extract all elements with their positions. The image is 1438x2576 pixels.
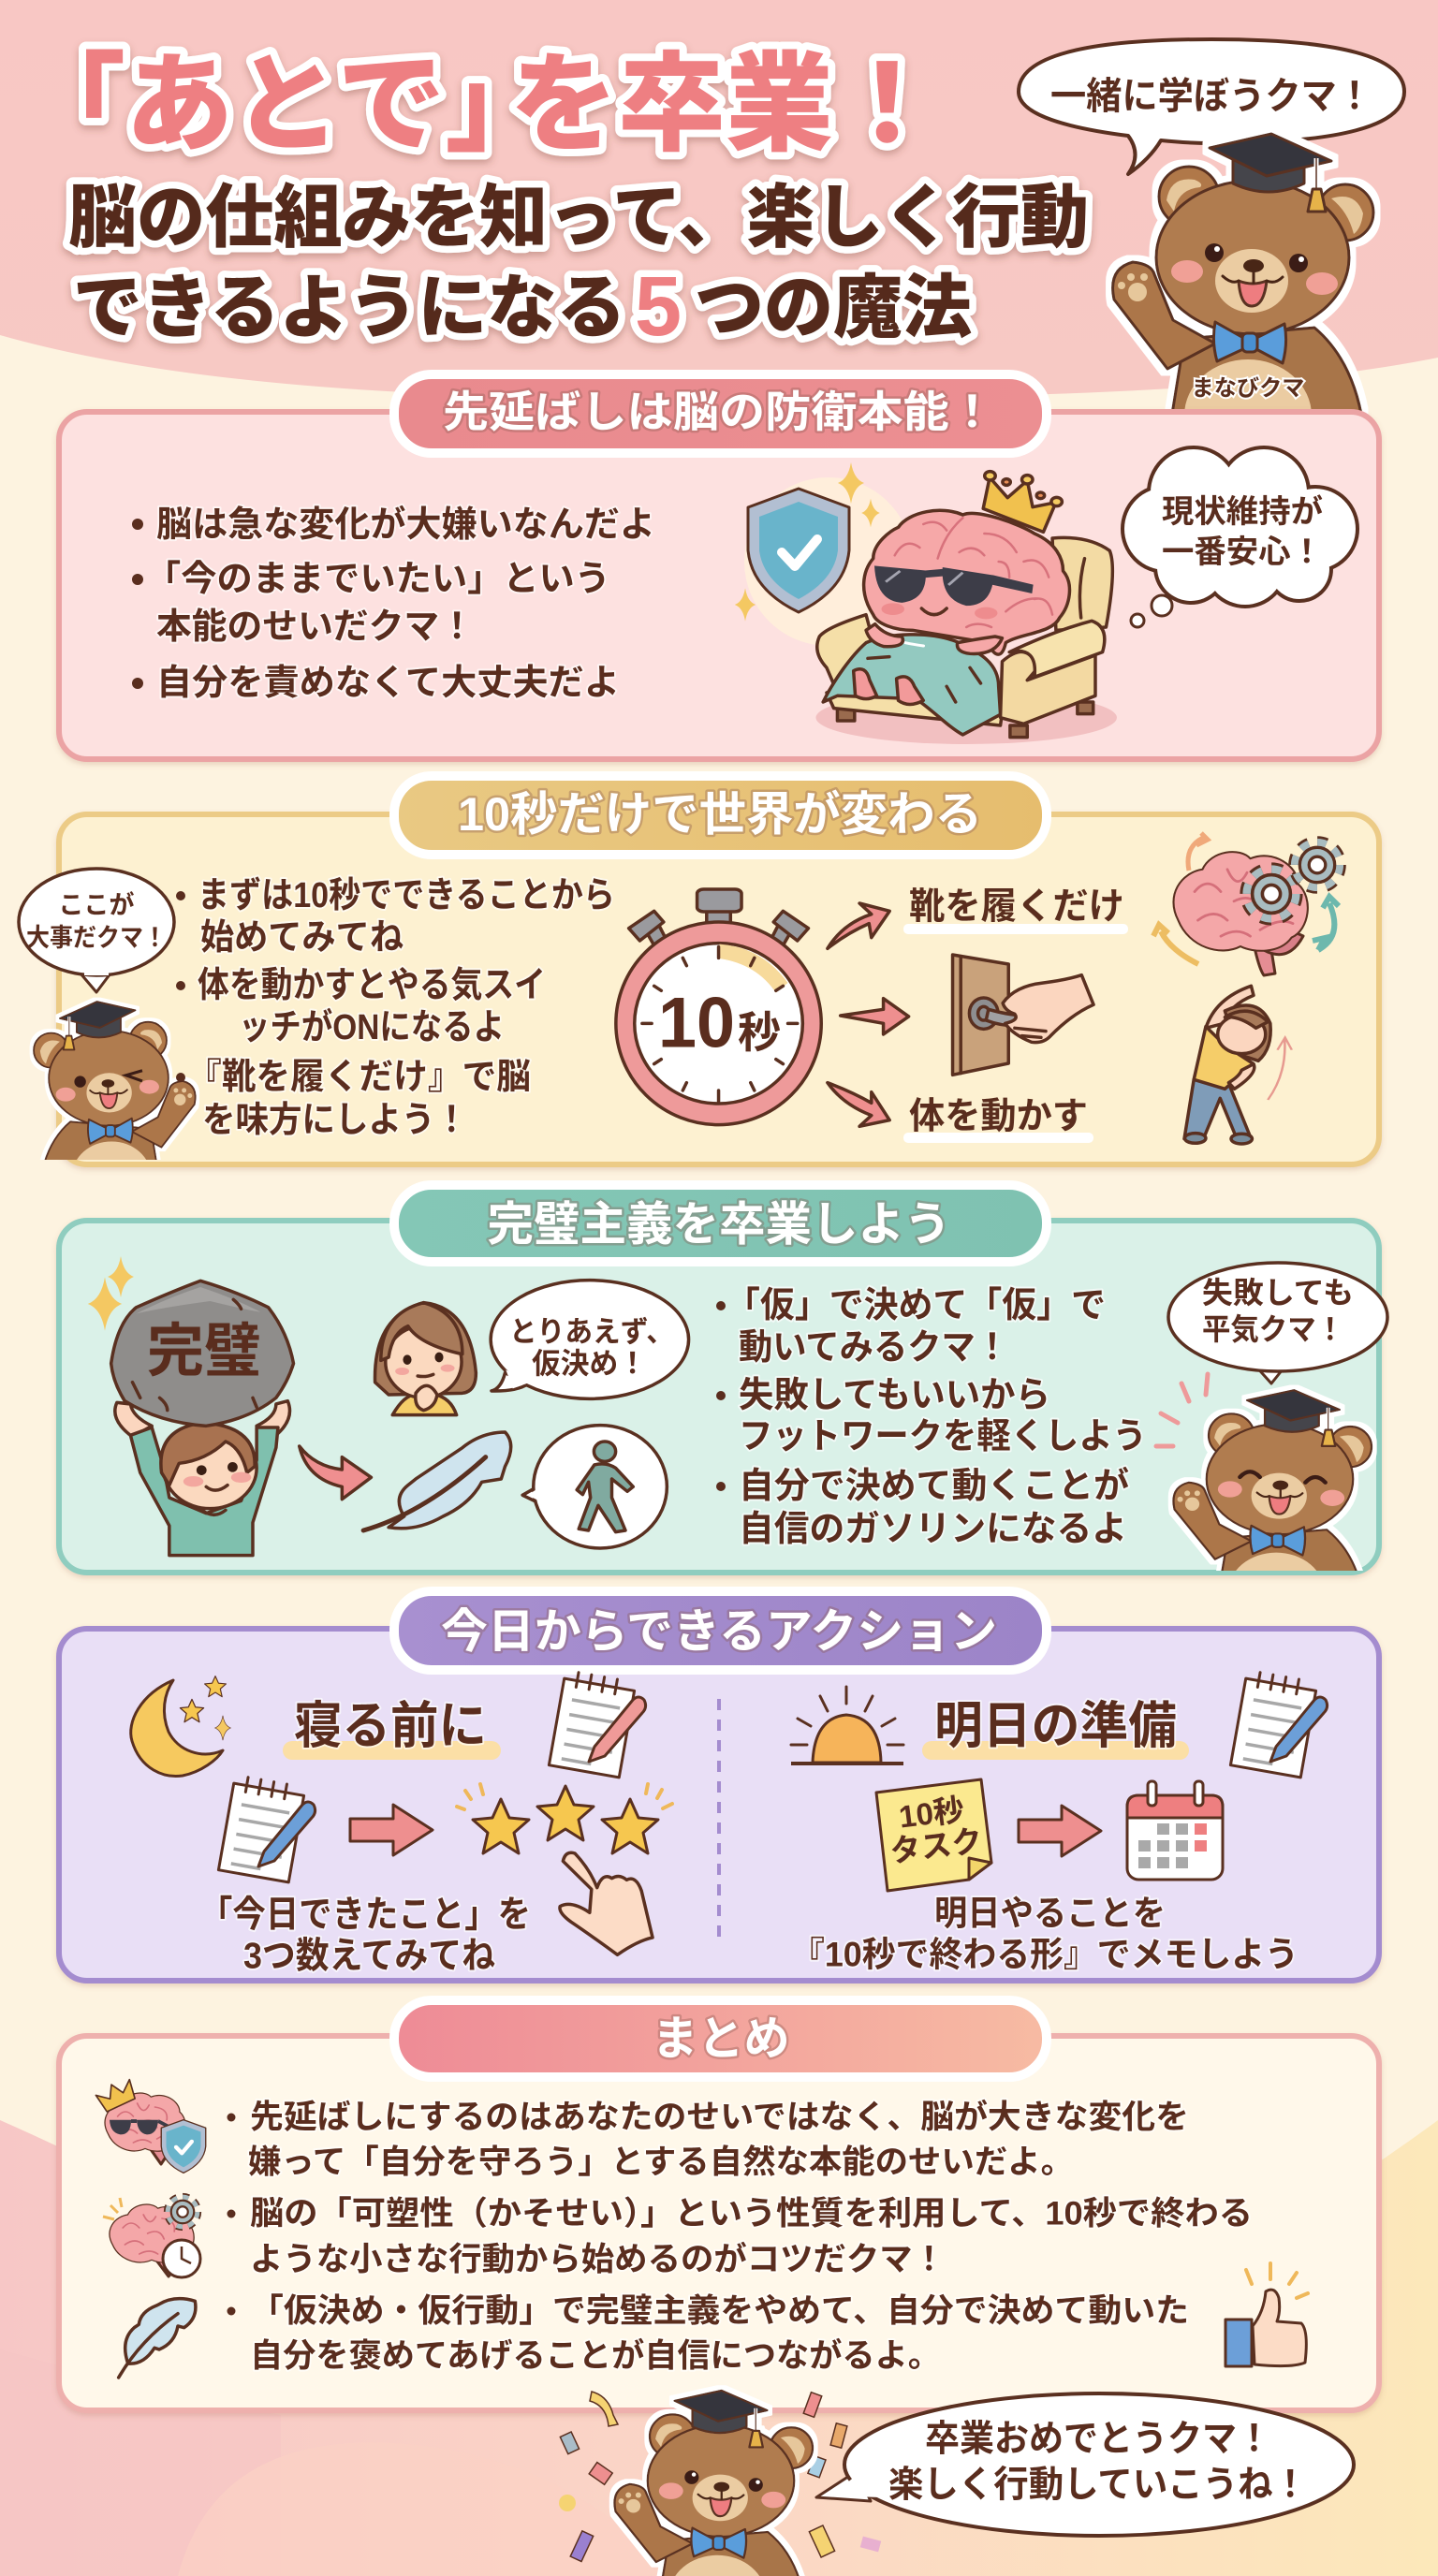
thought text: 現状維持が: [1162, 493, 1323, 530]
heading pill: [394, 2000, 1047, 2077]
bear: winking: [30, 998, 199, 1160]
bullet list: 体を動かすとやる気スイ: [198, 966, 546, 1005]
icon: notebook with blue pencil: [218, 1775, 315, 1882]
bullet list: 本能のせいだクマ！: [156, 607, 475, 647]
bullet text 3: 「仮決め・仮行動」で完璧主義をやめて、自分で決めて動いた: [250, 2293, 1189, 2329]
caption: before bed: 3つ数えてみてね: [243, 1936, 495, 1977]
bullet text 1: [227, 2099, 1189, 2181]
heading: tomorrow's prep: 明日の準備: [934, 1698, 1177, 1754]
bear: celebrating: [614, 2391, 813, 2576]
heading pill: 先延ばしは脳の防衛本能！: [443, 388, 995, 436]
illustration: door and hand: [953, 955, 1093, 1075]
stopwatch: [616, 889, 821, 1125]
speech bubble: tentative decision: とりあえず、: [509, 1316, 674, 1348]
bullet list: を味方にしよう！: [202, 1101, 468, 1140]
icon: brain with shield: [95, 2077, 206, 2173]
label: put on shoes: 靴を履くだけ: [909, 887, 1124, 927]
bullet list: まずは10秒でできることから: [198, 876, 615, 915]
speech bubble: important: [19, 869, 174, 992]
bubble text: 卒業おめでとうクマ！: [925, 2419, 1271, 2460]
bullet list: 脳は急な変化が大嫌いなんだよ: [156, 505, 655, 545]
bullet text 2: [227, 2196, 1253, 2278]
title: [18, 45, 1089, 354]
bullet list: 自分で決めて動くことが: [739, 1467, 1129, 1506]
bullet list: 自分を責めなくて大丈夫だよ: [156, 664, 620, 703]
icon: calendar: [1127, 1781, 1223, 1880]
speech bubble: failure okay: 平気クマ！: [1202, 1312, 1344, 1346]
bear name label: まなびクマ: [1191, 376, 1305, 401]
title line 3: 5: [635, 260, 682, 354]
title line 3: つの魔法: [695, 268, 972, 346]
bullet list: 始めてみてね: [200, 918, 404, 958]
bullet list: 「今のままでいたい」という: [145, 560, 610, 599]
heading pill: [394, 1185, 1047, 1262]
caption: tomorrow: 『10秒で終わる形』でメモしよう: [791, 1936, 1299, 1973]
panel: ten seconds: [19, 776, 1379, 1211]
bullet list: 動いてみるクマ！: [739, 1328, 1009, 1368]
bear: top mascot: [1113, 134, 1373, 472]
bullet text 2: 脳の「可塑性（かそせい）」という性質を利用して、10秒で終わる: [250, 2196, 1253, 2232]
bullet list: [176, 876, 615, 1140]
heading pill: まとめ: [652, 2012, 790, 2065]
bubble text: 一緒に学ぼうクマ！: [1050, 76, 1372, 117]
bullet list: フットワークを軽くしよう: [739, 1417, 1147, 1456]
speech bubble: tentative decision: 仮決め！: [532, 1348, 647, 1380]
bear: happy: [1153, 1372, 1377, 1571]
arrow: [1019, 1806, 1101, 1856]
icon: pointing hand: [560, 1852, 653, 1954]
bullet text 3: [227, 2293, 1189, 2374]
title line 1: を卒業！: [510, 45, 941, 165]
illustration: thinking woman: [375, 1303, 476, 1415]
speech bubble: important: ここが: [58, 890, 135, 919]
title line 3: できるようになる: [73, 268, 626, 346]
label: move body: 体を動かす: [909, 1097, 1088, 1136]
title line 1: 「あとで」: [18, 45, 553, 165]
icon: sticky note: 10秒: [897, 1792, 966, 1835]
bullet list: [132, 505, 655, 703]
rock label: 完璧: [147, 1320, 261, 1383]
speech bubble: tentative decision: [491, 1281, 689, 1398]
caption: tomorrow: [791, 1895, 1299, 1973]
arrow: [300, 1446, 371, 1500]
heading pill: 今日からできるアクション: [441, 1605, 997, 1658]
speech bubble: important: 大事だクマ！: [26, 924, 167, 952]
icon: three stars: [457, 1784, 672, 1853]
speech bubble: congratulations: [816, 2393, 1354, 2536]
panel: graduate perfectionism: [54, 1180, 1389, 1580]
icon: notebook with blue pencil: [1230, 1670, 1328, 1778]
panel: brain defense instinct: [59, 374, 1379, 759]
heading pill: [394, 776, 1047, 855]
caption: tomorrow: 明日やることを: [934, 1895, 1166, 1932]
bullet list: 「仮」で決めて「仮」で: [726, 1286, 1106, 1325]
caption: before bed: 「今日できたこと」を: [199, 1895, 531, 1936]
speech bubble: top bear: [1019, 39, 1404, 174]
bullet text 1: 嫌って「自分を守ろう」とする自然な本能のせいだよ。: [248, 2144, 1074, 2181]
thought bubble: [1124, 449, 1356, 627]
speech bubble: failure okay: 失敗しても: [1202, 1276, 1354, 1310]
stopwatch: 秒: [738, 1008, 781, 1057]
arrows: [828, 903, 909, 1126]
icon: feather: [119, 2299, 196, 2378]
bullet list: 自信のガソリンになるよ: [739, 1510, 1127, 1549]
arrow: [350, 1805, 433, 1855]
illustration: boy lifting rock: [111, 1281, 294, 1556]
icon: sunrise: [791, 1687, 903, 1764]
icon: moon and stars: [131, 1676, 230, 1777]
icon: brain with gear and clock: [103, 2198, 200, 2277]
illustration: brain with gears: [1153, 833, 1339, 975]
bullet text 3: 自分を褒めてあげることが自信につながるよ。: [250, 2338, 941, 2374]
heading pill: [394, 374, 1047, 453]
icon: sticky note: [876, 1779, 991, 1891]
bullet list: ッチがONになるよ: [239, 1008, 505, 1047]
icon: sticky note: タスク: [888, 1823, 984, 1868]
thought bubble: 一番安心！: [1162, 534, 1323, 570]
panel: today's actions: [59, 1591, 1379, 1981]
heading pill: [394, 1591, 1047, 1670]
bullet text 1: 先延ばしにするのはあなたのせいではなく、脳が大きな変化を: [250, 2099, 1189, 2136]
icon: shield: [735, 462, 913, 646]
icon: feather: [363, 1432, 511, 1530]
bullet list: 失敗してもいいから: [739, 1376, 1050, 1415]
title line 2: 脳の仕組みを知って、楽しく行動: [68, 178, 1089, 256]
heading pill: 10秒だけで世界が変わる: [458, 788, 982, 841]
heading: before bed: 寝る前に: [294, 1698, 487, 1754]
caption: before bed: [199, 1895, 531, 1977]
illustration: brain relaxing on armchair: [815, 472, 1117, 744]
speech bubble: walking person: [522, 1426, 667, 1548]
speech bubble: failure okay: [1168, 1263, 1387, 1383]
bullet list: 『靴を履くだけ』で脳: [187, 1058, 531, 1097]
speech bubble: congratulations: 楽しく行動していこうね！: [888, 2466, 1308, 2505]
bullet text 2: ような小さな行動から始めるのがコツだクマ！: [250, 2241, 946, 2278]
panel: summary: [59, 2000, 1379, 2410]
icon: sparkles: [88, 1256, 134, 1331]
stopwatch time: 10: [658, 983, 735, 1063]
bullet list: [716, 1286, 1147, 1549]
illustration: stretching person: [1184, 986, 1292, 1144]
heading pill: 完璧主義を卒業しよう: [487, 1198, 951, 1251]
confetti: [559, 2392, 881, 2562]
icon: thumbs up: [1225, 2263, 1308, 2366]
icon: notebook with pink pencil: [549, 1670, 646, 1778]
